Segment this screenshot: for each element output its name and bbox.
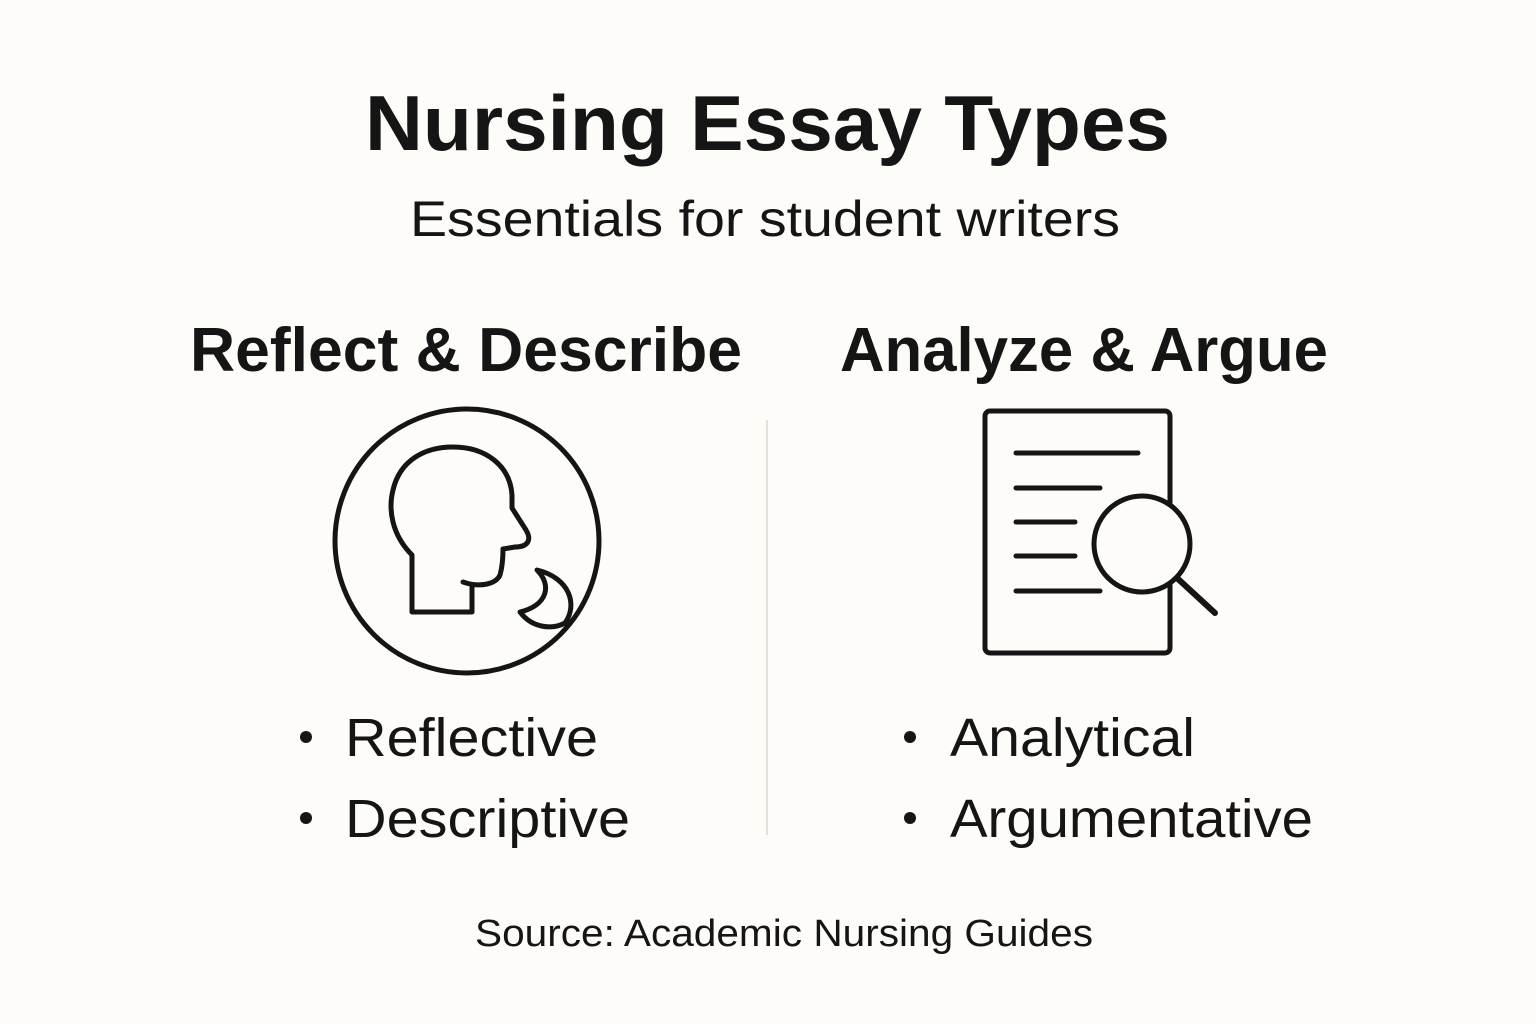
heading: Analyze & Argue: Analyze & Argue	[840, 316, 1328, 385]
bullets right: Analytical	[950, 708, 1195, 768]
bullets left: Descriptive	[345, 789, 630, 849]
icon: document with magnifier	[985, 411, 1215, 653]
subtitle: Essentials for student writers	[410, 191, 1120, 247]
title: Nursing Essay Types	[365, 79, 1170, 167]
bullets right: Argumentative	[950, 789, 1313, 849]
heading: Reflect & Describe: Reflect & Describe	[190, 316, 742, 385]
bullets left: Reflective	[345, 708, 598, 768]
icon: head in circle	[335, 409, 599, 673]
bullets left	[300, 708, 630, 849]
bullets right	[904, 708, 1313, 849]
source: Source: Academic Nursing Guides	[475, 913, 1093, 955]
